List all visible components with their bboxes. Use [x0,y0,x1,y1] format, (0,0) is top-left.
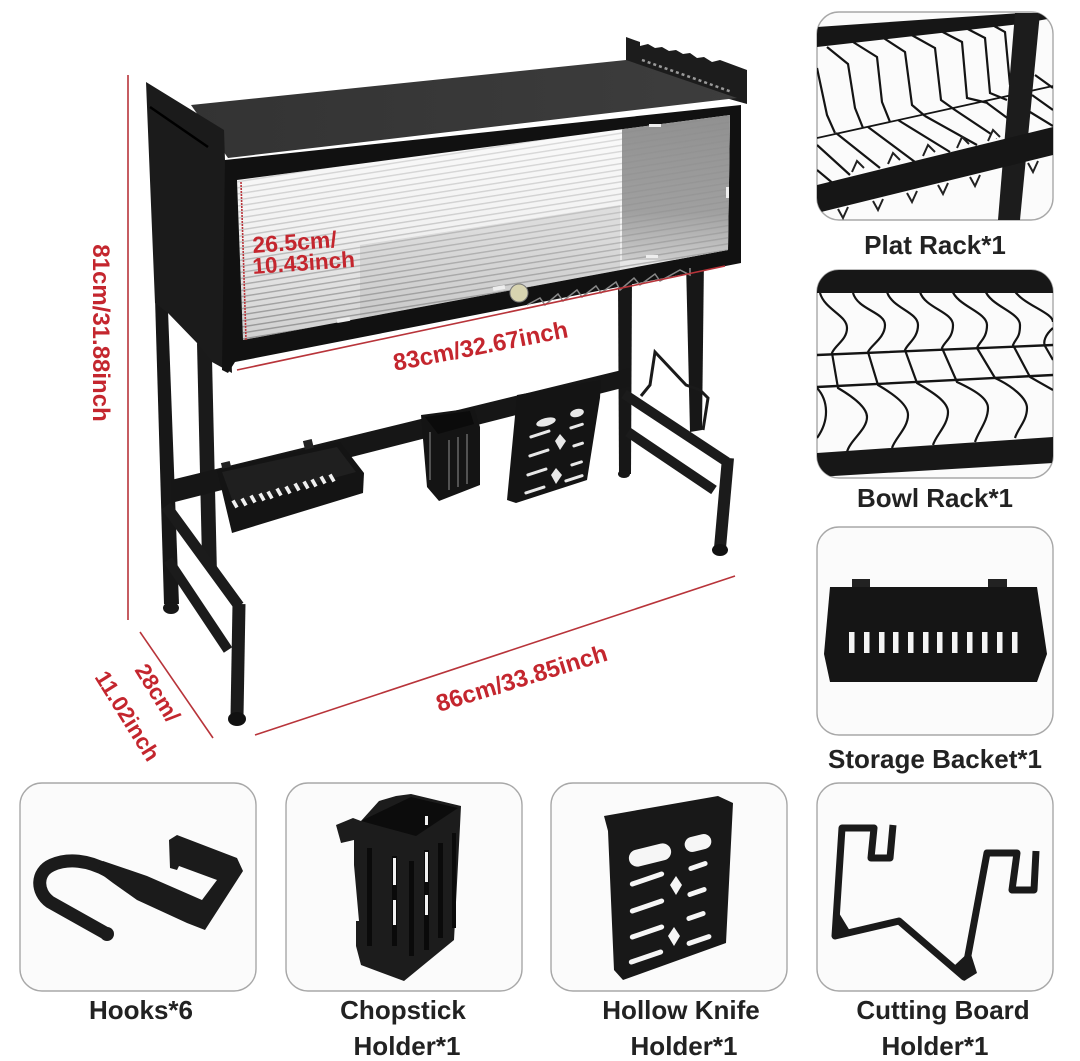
dimension: height 81cm: 81cm/31.88inch [87,244,114,422]
right end frame [624,394,728,548]
panel: hooks [20,783,256,991]
cross bar [171,368,630,503]
panel: hollow knife holder [551,783,787,991]
dimension: width 83cm [237,266,725,377]
cabinet left side panel [146,82,232,373]
right front foot [712,544,728,556]
panel: cutting board holder [817,783,1053,991]
label: cutting board holder: Cutting Board [856,995,1030,1025]
ribbed glass door [237,115,730,340]
front left leg [197,343,217,575]
chopstick holder [421,408,480,501]
dimension: depth 28cm: 11.02inch [90,666,165,766]
cabinet top surface [191,60,737,158]
label: plate rack: Plat Rack*1 [864,230,1006,260]
left front foot [228,712,246,726]
storage basket [217,439,364,533]
left end frame [166,506,239,716]
panel: chopstick holder [286,783,522,991]
dimension: depth 28cm: 28cm/ [130,659,185,727]
dimension: door height 26.5cm: 26.5cm/ [252,226,338,258]
dimension: width 83cm: 83cm/32.67inch [391,316,570,377]
label: hollow knife holder: Holder*1 [631,1031,737,1061]
label: chopstick holder [340,995,466,1061]
label: cutting board holder [856,995,1030,1061]
label: bowl rack: Bowl Rack*1 [857,483,1013,513]
panel: bowl rack [817,270,1053,478]
label: chopstick holder: Chopstick [340,995,466,1025]
label: hollow knife holder [602,995,760,1061]
cabinet front frame [222,105,741,373]
hollow knife holder [507,380,601,503]
hook with cutting board holder on the leg [641,352,708,430]
dimension: door height 26.5cm [241,182,356,340]
label: chopstick holder: Holder*1 [354,1031,460,1061]
dimension: width 86cm [255,576,735,735]
panel: plate rack [817,12,1053,220]
rear legs [155,258,704,614]
wire rack under door [527,268,690,305]
dimension: width 86cm: 86cm/33.85inch [433,640,611,718]
label: storage basket: Storage Backet*1 [828,744,1042,774]
label: hollow knife holder: Hollow Knife [602,995,760,1025]
label: cutting board holder: Holder*1 [882,1031,988,1061]
main product: dish rack with cabinet [146,37,747,726]
cabinet back rail with hooks [626,37,747,104]
label: hooks: Hooks*6 [89,995,193,1025]
dimension: depth 28cm [90,632,213,766]
door lock [510,284,528,302]
dimension: door height 26.5cm: 10.43inch [252,247,356,279]
panel: storage basket [817,527,1053,735]
